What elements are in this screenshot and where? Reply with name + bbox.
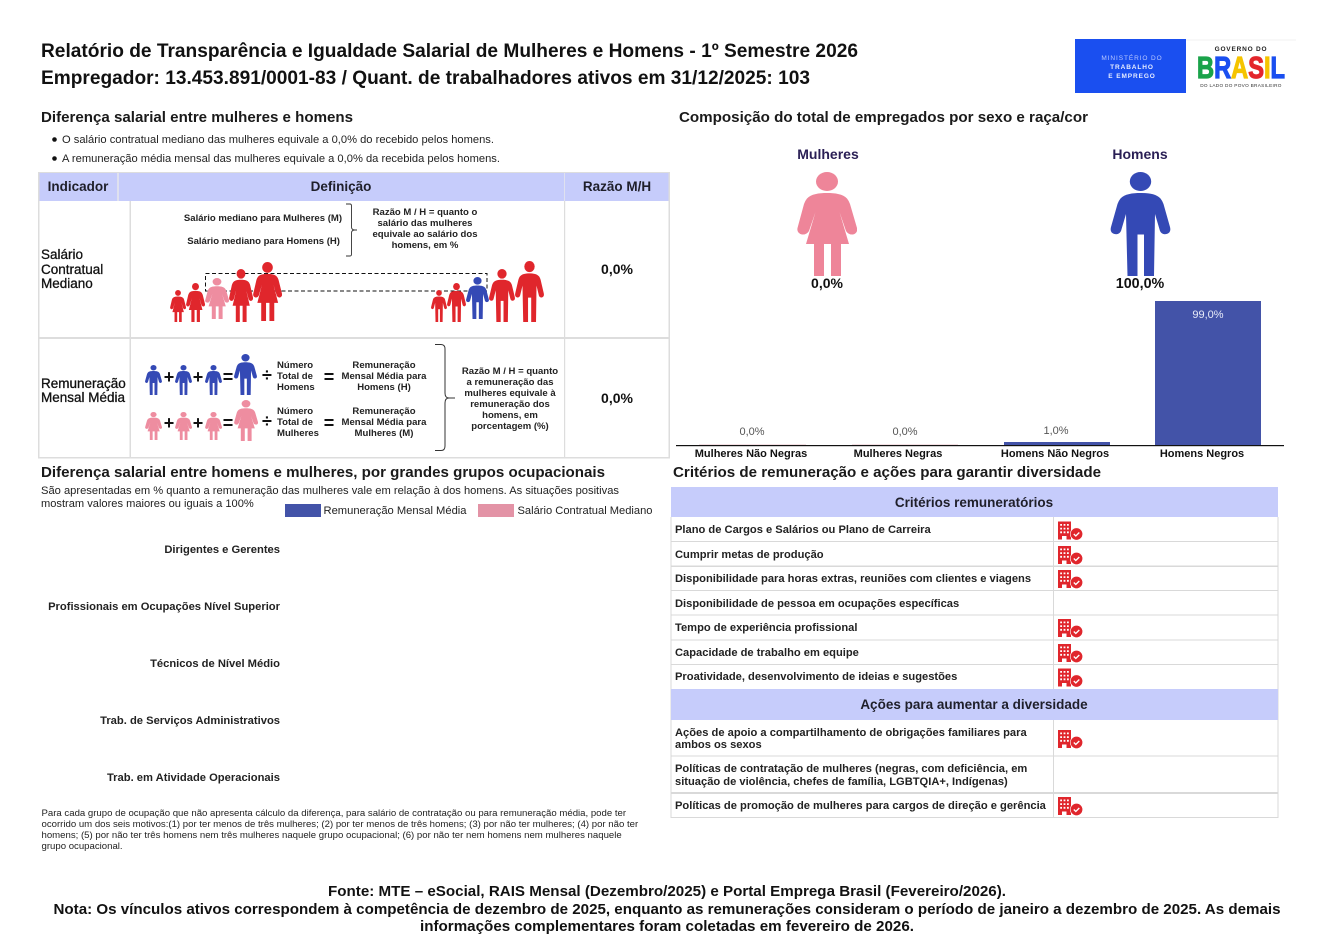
icon: family of women [170,262,282,322]
title [41,41,858,89]
bar chart: race and sex: Homens Não Negros [1001,448,1109,460]
table header: Indicador [48,179,109,194]
occupational group labels: Trab. de Serviços Administrativos [100,715,280,727]
occupational group labels [48,544,281,784]
formula: women: Remuneração [352,406,416,417]
footnote [42,808,639,852]
row: Salário Contratual Mediano: salário das mulheres [378,218,472,229]
row: Salário Contratual Mediano: Razão M / H = quanto o [373,207,478,218]
formula: men: Mensal Média para [342,371,427,382]
formula: men: Remuneração [352,360,416,371]
table header [38,172,670,201]
heading: grupos ocupacionais: Diferença salarial entre homens e mulheres, por grandes grupos ocupacionais [41,464,605,481]
formula: women: = [324,413,334,433]
formula: men [145,354,427,395]
occupational group labels: Trab. em Atividade Operacionais [107,772,280,784]
logo: Ministério do Trabalho e Emprego [1075,39,1186,93]
section header: ações: Ações para aumentar a diversidade [860,697,1088,712]
title: Relatório de Transparência e Igualdade Salarial de Mulheres e Homens - 1º Semestre 2026 [41,41,858,62]
row: Remuneração Mensal Média: porcentagem (%) [471,421,549,432]
text block: bullets: O salário contratual mediano das mulheres equivale a 0,0% do recebido pelos homens. [62,134,494,146]
formula: women: = [223,413,233,433]
logo: Ministério do Trabalho e Emprego: E EMPREGO [1108,73,1156,80]
actions rows: Políticas de contratação de mulheres (negras, com deficiência, em [675,763,1027,775]
formula: women: Mulheres (M) [355,428,413,439]
men pictogram: 100,0% [1116,276,1165,292]
row: Remuneração Mensal Média: mulheres equivale à [464,388,556,399]
icon: family of men [431,261,544,322]
formula: men: = [223,367,233,387]
section header: ações [671,689,1278,720]
heading: critérios: Critérios de remuneração e ações para garantir diversidade [673,464,1101,481]
formula: women: Mensal Média para [342,417,427,428]
row: Salário Contratual Mediano: Salário mediano para Homens (H) [187,236,340,247]
footer source note: Nota: Os vínculos ativos correspondem à competência de dezembro de 2025, enquanto as remunerações consideram o período de janeiro a dezembro de 2025. As demais [54,901,1280,918]
section header: critérios remuneratórios: Critérios remuneratórios [895,495,1053,510]
women pictogram: Mulheres [797,146,859,162]
footer source note: Fonte: MTE – eSocial, RAIS Mensal (Dezembro/2025) e Portal Emprega Brasil (Fevereiro/2026). [328,883,1006,900]
formula: men: Homens [277,382,315,393]
logo: Ministério do Trabalho e Emprego: MINISTÉRIO DO [1101,53,1163,62]
occupational group labels: Profissionais em Ocupações Nível Superior [48,601,281,613]
row: Remuneração Mensal Média [41,344,634,450]
formula: men: Total de [277,371,313,382]
text block: bullets: A remuneração média mensal das mulheres equivale a 0,0% da recebida pelos homens. [62,153,500,165]
logo: Ministério do Trabalho e Emprego: TRABALHO [1110,64,1154,71]
formula: women: ÷ [262,411,272,431]
bar chart: race and sex: 1,0% [1043,425,1069,437]
bar chart: race and sex: Mulheres Negras [854,448,942,460]
title: Empregador: 13.453.891/0001-83 / Quant. de trabalhadores ativos em 31/12/2025: 103 [41,68,810,89]
text block: occupational intro: mostram valores maiores ou iguais a 100% [41,498,254,510]
criteria rows: Disponibilidade de pessoa em ocupações específicas [675,598,959,610]
heading: composição: Composição do total de empregados por sexo e raça/cor [679,109,1088,126]
row: Remuneração Mensal Média: a remuneração das [466,377,554,388]
bar chart: race and sex: 99,0% [1192,309,1224,321]
criteria rows: Proatividade, desenvolvimento de ideias e sugestões [675,671,957,683]
row: Remuneração Mensal Média: homens, em [482,410,538,421]
panel: indicator table [38,172,670,458]
men pictogram [1111,146,1170,292]
section header: critérios remuneratórios [671,487,1278,517]
row: Remuneração Mensal Média: Remuneração [41,376,126,391]
legend: Salário Contratual Mediano [518,505,652,517]
bar chart: race and sex: 0,0% [892,426,918,438]
footnote: homens; (5) por não ter três homens nem três mulheres naquele grupo ocupacional; (6) por não ter nem homens nem mulheres naquele [42,830,622,841]
table header: Razão M/H [583,179,651,194]
footer source note [54,883,1280,935]
row: Remuneração Mensal Média: Mensal Média [41,390,126,405]
formula: women: + [193,413,203,433]
row: Remuneração Mensal Média: remuneração dos [470,399,550,410]
logo: Governo do Brasil: GOVERNO DO [1215,46,1267,53]
legend [285,504,652,517]
actions rows: Políticas de promoção de mulheres para cargos de direção e gerência [675,800,1047,812]
table header: Definição [311,179,371,194]
formula: men: ÷ [262,365,272,385]
heading: diferença salarial: Diferença salarial entre mulheres e homens [41,109,353,126]
criteria rows: Plano de Cargos e Salários ou Plano de Carreira [675,524,932,536]
row: Salário Contratual Mediano: Mediano [41,276,93,291]
formula: women: Número [277,406,313,417]
logo: Governo do Brasil: BRASIL [1197,50,1285,85]
actions rows [675,727,1047,812]
men pictogram: Homens [1112,146,1168,162]
criteria icons [1058,522,1083,687]
formula: men: Homens (H) [357,382,411,393]
actions rows: Ações de apoio a compartilhamento de obrigações familiares para [675,727,1027,739]
formula: men: + [193,367,203,387]
row: Salário Contratual Mediano: Salário mediano para Mulheres (M) [184,213,342,224]
footnote: grupo ocupacional. [42,841,123,852]
actions rows: situação de violência, chefes de família, LGBTQIA+, Indígenas) [675,776,1008,788]
footnote: ocorrido um dos seis motivos:(1) por ter menos de três mulheres; (2) por ter menos de três homens; (3) por não ter mulheres; (4) por não ter [42,819,639,830]
panel: sex composition [797,146,1170,292]
footer source note: informações complementares foram coletadas em fevereiro de 2026. [420,918,914,935]
text block: occupational intro [41,485,619,510]
bar chart: race and sex: Mulheres Não Negras [695,448,807,460]
row: Salário Contratual Mediano: Salário [41,247,83,262]
occupational group labels: Técnicos de Nível Médio [150,658,280,670]
criteria rows: Cumprir metas de produção [675,549,824,561]
formula: men: = [324,367,334,387]
logo: Governo do Brasil: DO LADO DO POVO BRASILEIRO [1200,83,1282,88]
text block: occupational intro: São apresentadas em % quanto a remuneração das mulheres vale em relação à dos homens. As situações positivas [41,485,619,497]
text block: bullets [52,134,500,165]
row: Salário Contratual Mediano: 0,0% [601,261,634,277]
criteria rows [675,524,1031,683]
panel: criteria table [670,487,1278,818]
row: Salário Contratual Mediano [41,204,634,322]
row: Salário Contratual Mediano: homens, em % [392,240,459,251]
women pictogram [797,146,859,291]
formula: women [145,400,427,441]
bar chart: race and sex: Homens Negros [1160,448,1244,460]
formula: women: Total de [277,417,313,428]
formula: women: + [164,413,174,433]
row: Remuneração Mensal Média: 0,0% [601,390,634,406]
actions rows: ambos os sexos [675,739,762,751]
criteria rows: Tempo de experiência profissional [675,622,857,634]
formula: men: Número [277,360,313,371]
formula: men: + [164,367,174,387]
women pictogram: 0,0% [811,275,844,291]
formula: women: Mulheres [277,428,319,439]
row: Salário Contratual Mediano: equivale ao salário dos [372,229,478,240]
footnote: Para cada grupo de ocupação que não apresenta cálculo da diferença, para salário de contratação ou para remuneração média, pode ter [42,808,627,819]
legend: Remuneração Mensal Média [324,505,467,517]
actions icons [1058,730,1083,816]
occupational group labels: Dirigentes e Gerentes [164,544,280,556]
row: Remuneração Mensal Média: Razão M / H = quanto [462,366,558,377]
criteria rows: Disponibilidade para horas extras, reuniões com clientes e viagens [675,573,1031,585]
criteria rows: Capacidade de trabalho em equipe [675,647,859,659]
logo: Governo do Brasil [1186,40,1296,88]
row: Salário Contratual Mediano: Contratual [41,262,103,277]
bar chart: race and sex: 0,0% [739,426,765,438]
bar chart: race and sex [676,301,1284,460]
